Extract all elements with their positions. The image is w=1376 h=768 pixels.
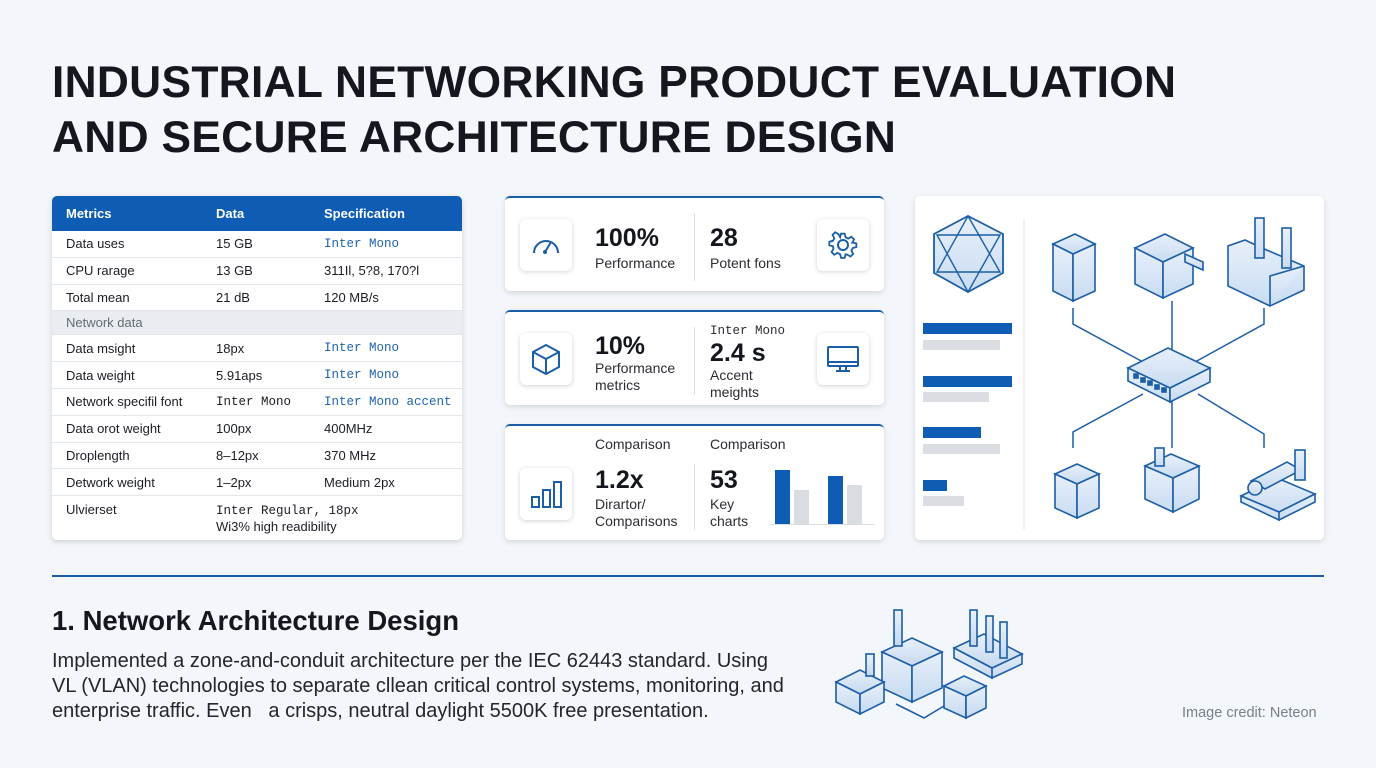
card: performance: [505, 196, 884, 291]
panel: metrics table: CPU rarage: [66, 263, 135, 278]
panel: metrics table: Inter Mono: [324, 341, 399, 355]
panel: metrics table: Network specifil font: [66, 394, 182, 409]
panel: metrics table: Data weight: [66, 368, 135, 383]
icon: server: [1053, 234, 1095, 301]
panel: metrics table: 120 MB/s: [324, 290, 379, 305]
card: performance metrics: metrics: [595, 377, 640, 393]
card: comparison: 53: [710, 466, 738, 494]
panel: metrics table: Data uses: [66, 236, 125, 251]
body text: [52, 650, 784, 722]
panel: metrics table: 18px: [216, 341, 244, 356]
panel: metrics table: Inter Mono: [216, 395, 291, 409]
panel: metrics table: Network data: [66, 315, 143, 330]
image credit: Image credit: Neteon: [1182, 705, 1317, 721]
icon: factory: [1228, 218, 1304, 306]
panel: metrics table: Inter Regular, 18px: [216, 504, 359, 518]
table header: Metrics: [66, 206, 112, 221]
panel: metrics table: Data orot weight: [66, 421, 161, 436]
bars: [923, 323, 1012, 506]
panel: metrics table: Wi3% high readibility: [216, 519, 337, 534]
body text: VL (VLAN) technologies to separate cllean critical control systems, monitoring, and: [52, 675, 784, 697]
icon: bar chart: [520, 468, 572, 520]
panel: metrics table: 370 MHz: [324, 448, 376, 463]
icon: switch: [1128, 348, 1210, 402]
card: comparison: Comparisons: [595, 513, 677, 529]
panel: metrics table: Inter Mono accent: [324, 395, 452, 409]
icon: monitor: [817, 333, 869, 385]
card: comparison: [505, 424, 884, 540]
panel: metrics table: 8–12px: [216, 448, 259, 463]
card: comparison: charts: [710, 513, 748, 529]
panel: metrics table: 15 GB: [216, 236, 253, 251]
panel: metrics table: Inter Mono: [324, 368, 399, 382]
card: performance: Performance: [595, 255, 675, 271]
connection lines: [1073, 301, 1264, 448]
panel: metrics table: 100px: [216, 421, 251, 436]
icon: cube: [520, 333, 572, 385]
card: performance metrics: Performance: [595, 360, 675, 376]
panel: metrics table: 1–2px: [216, 475, 251, 490]
chart: comparison bars: [770, 470, 874, 525]
card: performance metrics: [505, 310, 884, 405]
panel: metrics table: Medium 2px: [324, 475, 395, 490]
title: AND SECURE ARCHITECTURE DESIGN: [52, 113, 896, 162]
title: [52, 58, 1176, 162]
card: performance metrics: 2.4 s: [710, 339, 766, 367]
table header: [52, 196, 462, 231]
icon: hexagon: [934, 216, 1003, 292]
panel: metrics table: Droplength: [66, 448, 130, 463]
panel: metrics table: Data msight: [66, 341, 135, 356]
icon: motor: [1241, 450, 1315, 520]
card: comparison: Comparison: [595, 436, 670, 452]
card: comparison: Key: [710, 496, 734, 512]
panel: metrics table: 400MHz: [324, 421, 372, 436]
body text: enterprise traffic. Even a crisps, neutral daylight 5500K free presentation.: [52, 700, 709, 722]
icon: gear: [817, 219, 869, 271]
body text: Implemented a zone-and-conduit architecture per the IEC 62443 standard. Using: [52, 650, 768, 672]
card: comparison: 1.2x: [595, 466, 644, 494]
card: performance metrics: Inter Mono: [710, 324, 785, 338]
icon: machine: [1135, 234, 1203, 298]
table header: Data: [216, 206, 244, 221]
card: performance: Potent fons: [710, 255, 781, 271]
illustration: factory cluster: [834, 609, 1024, 720]
panel: metrics table: [52, 196, 462, 540]
card: performance: 100%: [595, 224, 659, 252]
icon: cabinet: [1055, 464, 1099, 518]
panel: metrics table: 21 dB: [216, 290, 250, 305]
card: performance metrics: Accent: [710, 367, 753, 383]
card: performance metrics: meights: [710, 384, 759, 400]
panel: metrics table: Total mean: [66, 290, 130, 305]
card: comparison: Comparison: [710, 436, 785, 452]
panel: network diagram: [915, 196, 1324, 540]
title: INDUSTRIAL NETWORKING PRODUCT EVALUATION: [52, 58, 1176, 107]
panel: metrics table: 5.91aps: [216, 368, 262, 383]
table header: Specification: [324, 206, 405, 221]
icon: generator: [1145, 448, 1199, 512]
card: comparison: Dirartor/: [595, 496, 646, 512]
panel: metrics table: Inter Mono: [324, 237, 399, 251]
card: performance metrics: 10%: [595, 332, 645, 360]
panel: metrics table: 13 GB: [216, 263, 253, 278]
section heading: 1. Network Architecture Design: [52, 605, 459, 636]
card: performance: 28: [710, 224, 738, 252]
panel: metrics table: Ulvierset: [66, 502, 117, 517]
panel: metrics table: Detwork weight: [66, 475, 155, 490]
panel: metrics table: 311Il, 5?8, 170?l: [324, 263, 419, 278]
icon: gauge: [520, 219, 572, 271]
